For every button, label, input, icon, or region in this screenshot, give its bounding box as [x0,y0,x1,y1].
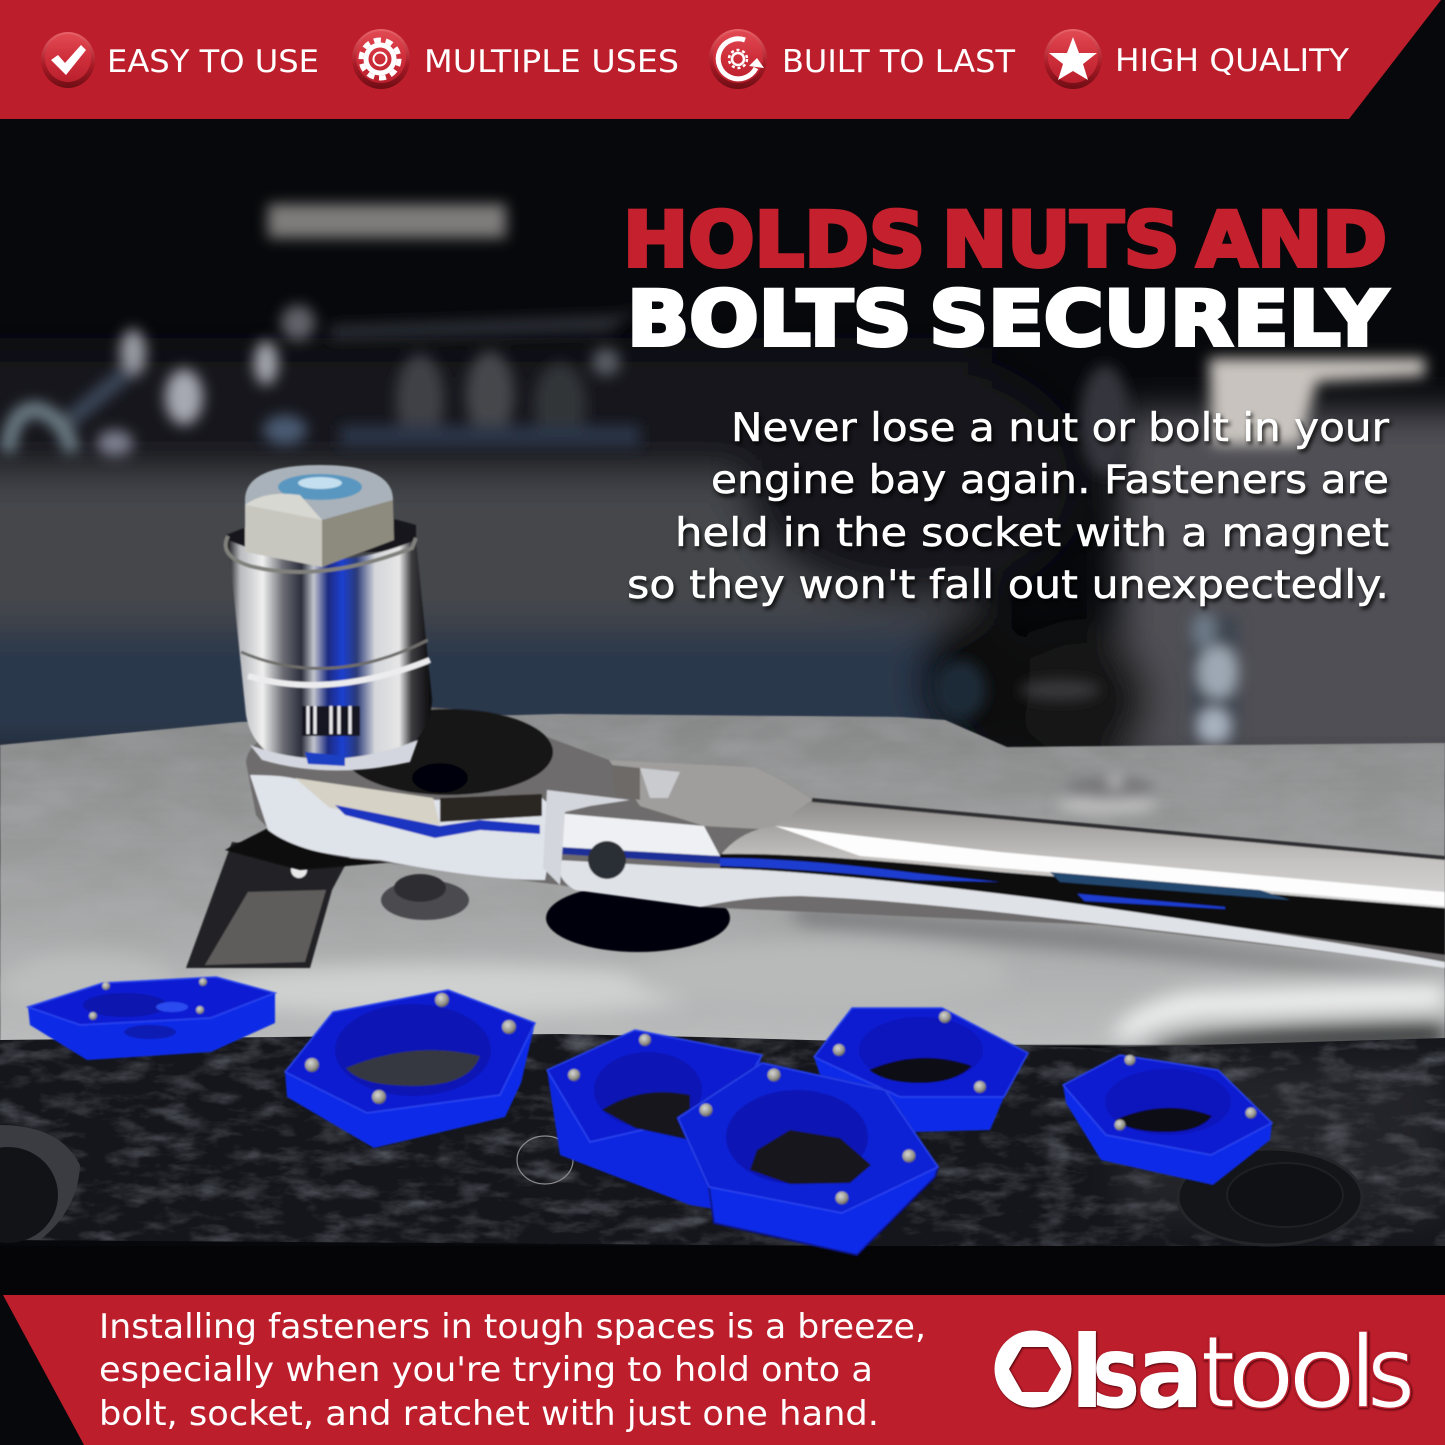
feature: high quality [1044,29,1349,89]
socket with nut [226,465,432,771]
blurred engine bay backdrop [0,204,1445,770]
body text: so they won't fall out unexpectedly. [627,563,1389,608]
top red banner [0,0,1441,119]
headline: BOLTS SECURELY [627,274,1388,363]
banner text: especially when you're trying to hold onto a [99,1350,873,1389]
rectangular slot in plate [186,842,350,968]
plate boss detail [1058,776,1158,813]
logo: Olsatools [994,1314,1415,1431]
dark valve cover bar [0,1034,1445,1250]
socket reflection dots [302,706,360,736]
feature: built to last: BUILT TO LAST [782,44,1016,80]
body text: held in the socket with a magnet [675,511,1389,556]
hex holder 4 [678,1063,938,1255]
body text: Never lose a nut or bolt in your [731,406,1390,451]
ratchet handle dark band [720,854,1445,955]
feature: built to last [709,29,1016,89]
headline: HOLDS NUTS AND [623,195,1387,284]
logo: Olsatools: l [1070,1314,1104,1431]
feature: easy to use [41,32,319,88]
ratchet handle upper chrome [720,800,1445,920]
ratchet handle lower band [557,860,1445,968]
hex nut body [245,505,322,567]
engine cover plate [0,714,1445,1045]
logo: Olsatools: o [1227,1314,1295,1431]
ratchet handle blue stripes [720,858,1000,882]
bottom red banner [3,1295,1445,1445]
round recess under ratchet [546,884,730,952]
bolt under ratchet [381,874,469,920]
ratchet head chrome [250,775,557,880]
ratchet shadow [225,828,394,870]
ratchet neck and lever [557,813,720,856]
headline [623,195,1388,363]
magnetic hex holders [28,977,1272,1255]
hex holder 2 [285,990,535,1148]
ratchet head cavity [343,709,553,795]
hex holder 5 [814,1008,1028,1132]
ratchet wrench [225,707,1445,968]
banner text [99,1307,926,1433]
logo: Olsatools: O [997,1363,1008,1378]
body text: engine bay again. Fasteners are [711,458,1389,503]
ratchet pawl housing [609,760,812,832]
ratchet body rim [246,707,1445,966]
logo: Olsatools: s [1367,1314,1415,1431]
body text [627,406,1390,608]
feature: high quality: HIGH QUALITY [1115,43,1349,79]
icon: gear [352,29,410,89]
hex holder 1 [28,977,275,1060]
feature: easy to use: EASY TO USE [107,44,319,80]
banner text: Installing fasteners in tough spaces is a breeze, [99,1307,926,1346]
ratchet handle highlight [775,826,1445,906]
logo: Olsatools: l [1349,1314,1377,1431]
socket inner back rim [226,512,416,552]
icon: check [41,32,95,88]
socket rim ring [226,536,416,572]
logo: Olsatools: t [1201,1314,1235,1431]
logo: Olsatools: s [1092,1314,1140,1431]
socket rings [241,640,428,668]
socket cylinder [228,540,432,770]
logo: Olsatools: a [1136,1314,1204,1431]
hex holder 3 [547,1030,762,1210]
feature: multiple uses [352,29,679,89]
feature: multiple uses: MULTIPLE USES [424,44,679,80]
hex holder 6 [1063,1054,1272,1185]
logo: Olsatools: o [1288,1314,1356,1431]
icon: cycle gear [709,29,767,89]
hex nut top [245,465,393,520]
icon: star [1044,29,1102,89]
banner text: bolt, socket, and ratchet with just one hand. [99,1394,879,1433]
